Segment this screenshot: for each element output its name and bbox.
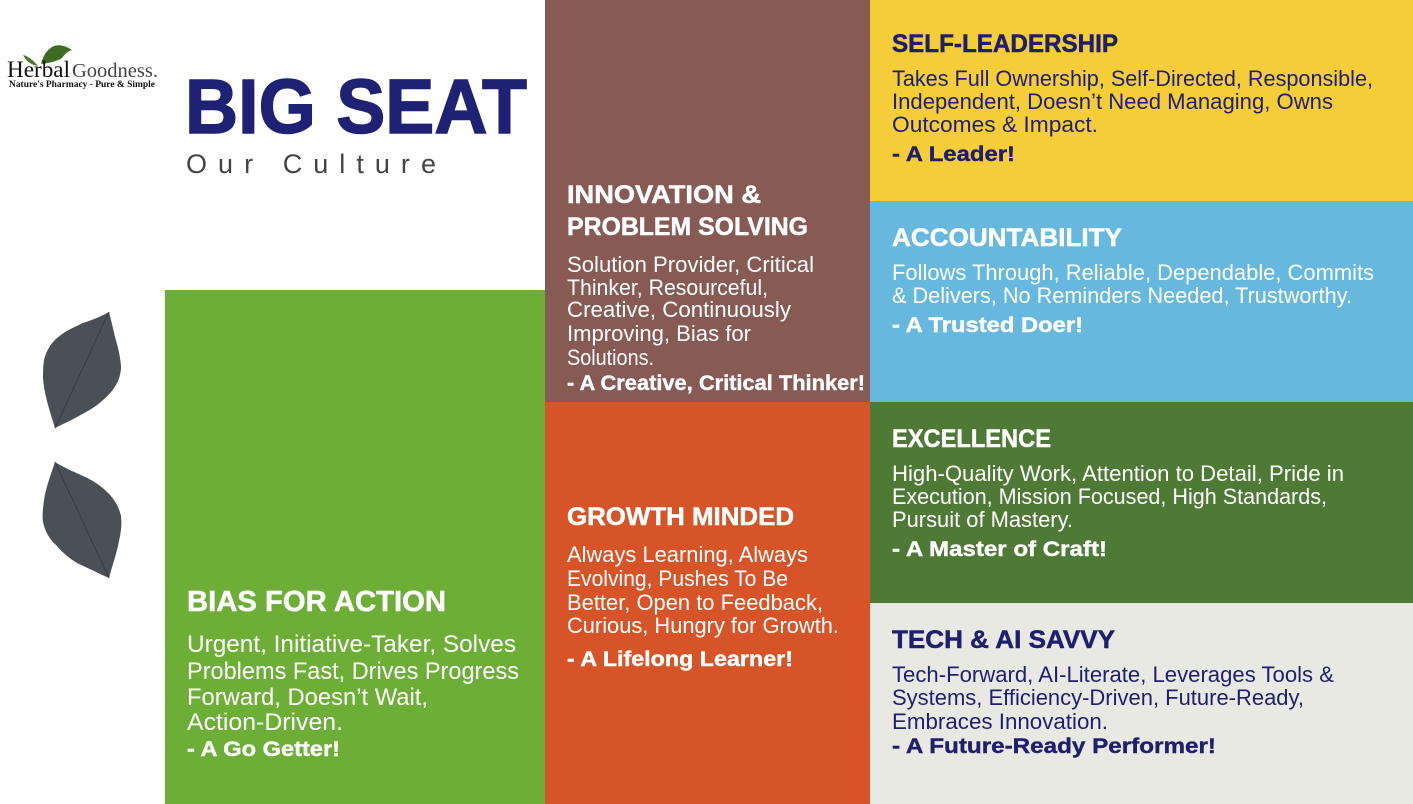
- body: tech and ai savvy: [892, 662, 1334, 734]
- body: bias for action: Problems Fast, Drives Progress: [187, 658, 519, 685]
- body: innovation: Improving, Bias for: [567, 321, 751, 346]
- panel: growth minded: [545, 402, 870, 804]
- body: growth minded: [567, 542, 839, 638]
- body: excellence: Pursuit of Mastery.: [892, 507, 1073, 532]
- body: self-leadership: Outcomes & Impact.: [892, 112, 1098, 137]
- title: BIG SEAT: [185, 64, 527, 150]
- body: tech and ai savvy: Tech-Forward, AI-Literate, Leverages Tools &: [892, 662, 1334, 687]
- tagline: future-ready performer: - A Future-Ready Performer!: [892, 735, 1216, 758]
- subtitle: Our Culture: [186, 149, 436, 179]
- body: tech and ai savvy: Embraces Innovation.: [892, 709, 1108, 734]
- tagline: a go getter: - A Go Getter!: [187, 738, 340, 761]
- body: growth minded: Evolving, Pushes To Be: [567, 566, 788, 591]
- heading: bias for action: BIAS FOR ACTION: [187, 586, 446, 618]
- heading: tech and ai savvy: TECH & AI SAVVY: [892, 626, 1115, 654]
- body: growth minded: Always Learning, Always: [567, 542, 808, 567]
- heading: innovation and problem solving: [567, 181, 808, 241]
- body: bias for action: [187, 631, 519, 736]
- tagline: creative critical thinker: - A Creative, Critical Thinker!: [567, 372, 865, 395]
- icon: upper leaf: [43, 312, 121, 428]
- body: self-leadership: [892, 66, 1373, 137]
- panel: bias for action: [165, 290, 545, 804]
- body: bias for action: Urgent, Initiative-Taker, Solves: [187, 631, 516, 658]
- logo: Herbal Goodness: Nature's Pharmacy - Pure & Simple: [9, 79, 155, 89]
- tagline: trusted doer: - A Trusted Doer!: [892, 314, 1083, 337]
- body: self-leadership: Takes Full Ownership, Self-Directed, Responsible,: [892, 66, 1373, 91]
- body: excellence: Execution, Mission Focused, High Standards,: [892, 484, 1327, 509]
- body: growth minded: Better, Open to Feedback,: [567, 590, 823, 615]
- body: tech and ai savvy: Systems, Efficiency-Driven, Future-Ready,: [892, 685, 1304, 710]
- tagline: lifelong learner: - A Lifelong Learner!: [567, 648, 793, 671]
- panel: innovation and problem solving: [545, 0, 870, 402]
- heading: innovation and problem solving: PROBLEM SOLVING: [567, 213, 808, 241]
- logo: Herbal Goodness: Herbal: [7, 57, 70, 82]
- panel: self-leadership: [870, 0, 1413, 201]
- logo: Herbal Goodness: Goodness.: [72, 60, 158, 82]
- body: innovation: Solution Provider, Critical: [567, 252, 814, 277]
- heading: self-leadership: SELF-LEADERSHIP: [892, 30, 1118, 58]
- heading: excellence: EXCELLENCE: [892, 425, 1051, 453]
- body: innovation: Creative, Continuously: [567, 297, 791, 322]
- heading: innovation and problem solving: INNOVATION &: [567, 181, 761, 209]
- body: accountability: [892, 260, 1374, 308]
- body: bias for action: Forward, Doesn’t Wait,: [187, 684, 428, 711]
- body: innovation: Thinker, Resourceful,: [567, 275, 768, 300]
- logo: Herbal Goodness: [7, 45, 158, 89]
- body: innovation: Solutions.: [567, 345, 654, 370]
- body: excellence: High-Quality Work, Attention to Detail, Pride in: [892, 461, 1344, 486]
- body: innovation: [567, 252, 814, 370]
- panel: excellence: [870, 402, 1413, 603]
- heading: accountability: ACCOUNTABILITY: [892, 224, 1122, 252]
- body: growth minded: Curious, Hungry for Growth.: [567, 613, 839, 638]
- tagline: a leader: - A Leader!: [892, 143, 1015, 166]
- tagline: master of craft: - A Master of Craft!: [892, 538, 1107, 561]
- body: accountability: & Delivers, No Reminders Needed, Trustworthy.: [892, 283, 1352, 308]
- panel: tech and ai savvy: [870, 603, 1413, 804]
- body: bias for action: Action-Driven.: [187, 709, 343, 736]
- body: self-leadership: Independent, Doesn’t Need Managing, Owns: [892, 89, 1333, 114]
- body: accountability: Follows Through, Reliable, Dependable, Commits: [892, 260, 1374, 285]
- heading: growth minded: GROWTH MINDED: [567, 503, 794, 531]
- body: excellence: [892, 461, 1344, 532]
- icon: lower leaf: [43, 462, 121, 578]
- panel: accountability: [870, 201, 1413, 402]
